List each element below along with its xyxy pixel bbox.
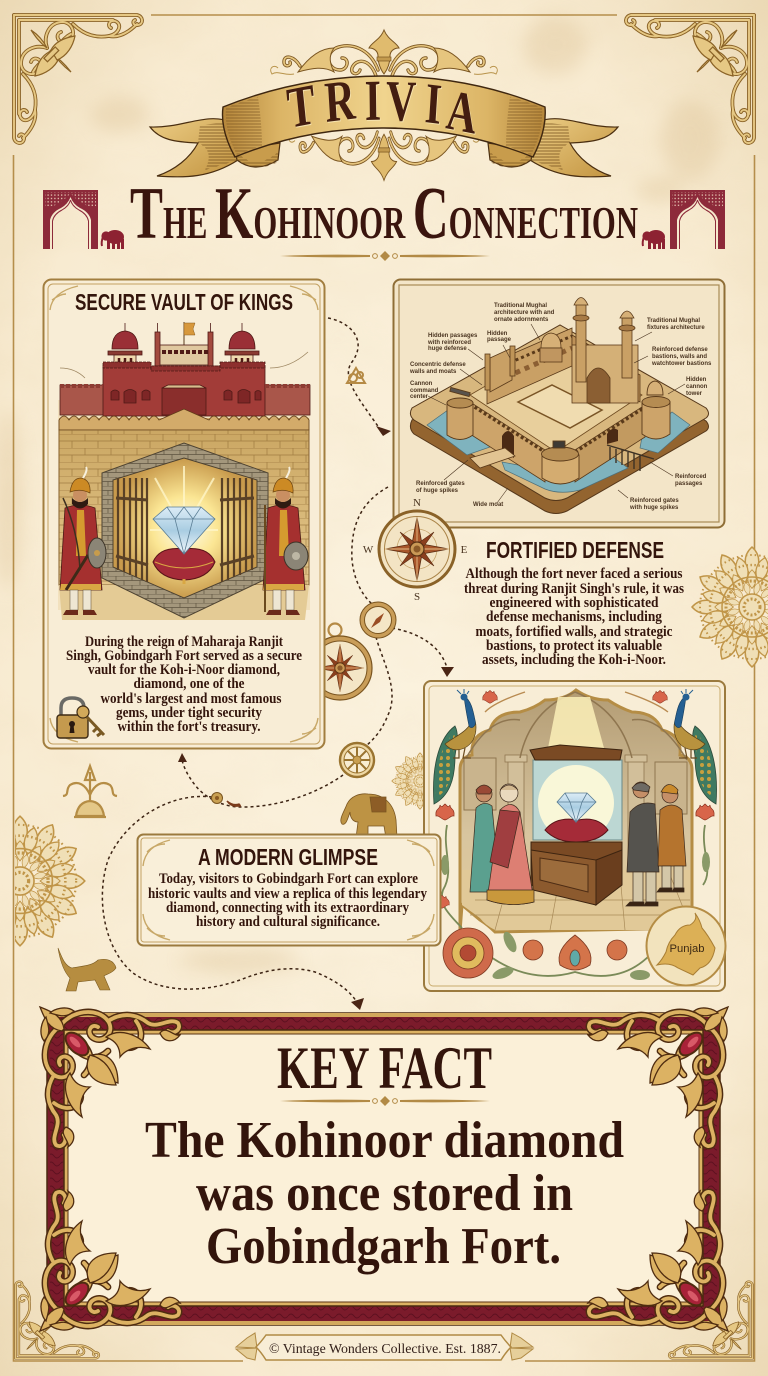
card body text: within the fort's treasury. (118, 719, 260, 735)
panel: a modern glimpse (138, 834, 440, 946)
key fact statement (145, 1112, 624, 1275)
big rosette (443, 928, 493, 978)
iron spikes (607, 445, 654, 471)
footer pill (256, 1335, 511, 1360)
frame gold rule bottom (48, 1321, 719, 1325)
key fact statement: Gobindgarh Fort. (206, 1218, 561, 1275)
text block: fortified defense (464, 537, 684, 668)
diagram callouts: passages (675, 481, 703, 487)
page corner ornament bottom left (16, 1282, 99, 1358)
battlements (59, 409, 309, 430)
compass letters: E (461, 544, 468, 556)
frame lace (50, 1016, 717, 1322)
pocket compass (308, 624, 372, 700)
flag (184, 322, 195, 345)
body text: diamond, connecting with its extraordinary (166, 900, 410, 916)
diagram callouts: huge defense (428, 346, 467, 352)
body text: threat during Ranjit Singh's rule, it was (464, 581, 684, 597)
gold lion icon (58, 948, 116, 991)
dashed journey paths (102, 318, 454, 1010)
light beam (548, 697, 604, 748)
key fact statement: The Kohinoor diamond (145, 1112, 624, 1169)
front left wall (470, 402, 545, 482)
wall gates (502, 429, 618, 458)
isometric fort base (410, 335, 708, 514)
diagram callouts: Reinforced gates (630, 498, 679, 504)
left elephant (101, 230, 124, 249)
back walls (487, 328, 640, 404)
visitor teal dress (470, 785, 500, 892)
moat water (427, 410, 690, 492)
corner ornament bottom right (588, 1191, 728, 1331)
page corner ornament top right (626, 15, 754, 143)
illustration: red fort and vault (58, 322, 310, 620)
small compass (360, 602, 396, 638)
corner towers (447, 381, 670, 484)
corner ornament top right (588, 1007, 728, 1147)
diagram callouts: fixtures architecture (647, 325, 705, 331)
corner ornament bottom left (40, 1191, 180, 1331)
copyright: © Vintage Wonders Collective. Est. 1887. (269, 1342, 501, 1357)
maroon frame (47, 1013, 720, 1325)
body text: moats, fortified walls, and strategic (476, 624, 673, 640)
vault stone box (102, 443, 268, 618)
body text: Today, visitors to Gobindgarh Fort can explore (159, 871, 418, 887)
wall paintings (464, 758, 687, 814)
large compass rose (363, 497, 468, 603)
ribbon tails (150, 119, 618, 177)
diagram callouts: Traditional Mughal (647, 318, 700, 324)
Punjab map medallion: Punjab (670, 943, 704, 955)
inner panel (64, 1030, 703, 1306)
diagram callouts: architecture with and (494, 310, 555, 316)
corner flourishes (143, 840, 434, 940)
red gatehouse (60, 362, 310, 416)
card body text: world's largest and most famous (100, 691, 282, 707)
diamond glow rays (150, 466, 218, 530)
banner title highlight: TRIVIA (285, 68, 481, 147)
ribbon end hatching (226, 97, 542, 155)
heading: FORTIFIED DEFENSE (486, 537, 664, 563)
inner paper (68, 1034, 699, 1302)
trivia banner (150, 30, 618, 180)
right arch (670, 190, 725, 249)
card body text: diamond, one of the (134, 676, 245, 692)
display case (530, 745, 622, 905)
domed towers (108, 323, 259, 368)
corner ornament top left (40, 1007, 180, 1147)
diagram callouts: Hidden (487, 331, 508, 337)
card corner flourishes (50, 286, 318, 742)
diagram callouts: watchtower bastions (651, 361, 712, 367)
arrow emblem icon (63, 766, 117, 817)
body text: assets, including the Koh-i-Noor. (482, 652, 666, 668)
showcase cushion (545, 819, 608, 842)
fort background glow (58, 400, 310, 610)
body text: engineered with sophisticated (490, 595, 658, 611)
diagram callouts: passage (487, 337, 512, 343)
visitor brown coat (657, 784, 686, 892)
museum vault columns (465, 692, 687, 870)
diagram callouts (409, 303, 712, 511)
showcase diamond (557, 793, 596, 822)
body text (464, 566, 684, 668)
compass letters: S (414, 591, 420, 603)
floral vines (442, 692, 707, 976)
body text: historic vaults and view a replica of this legendary (148, 886, 428, 902)
panel: key fact (40, 1007, 728, 1331)
diagram callouts: Hidden passages (428, 333, 478, 339)
diagram callouts: cannon (686, 384, 708, 390)
banner title: TRIVIA (284, 67, 480, 146)
ribbon main band (222, 76, 545, 157)
courtyard (470, 345, 642, 452)
cushion (153, 549, 215, 584)
museum arch interior (460, 690, 692, 932)
main gate complex (572, 298, 638, 403)
footer plate (236, 1333, 533, 1360)
diagram callouts: Hidden (686, 377, 707, 383)
diagram callouts: Concentric defense (410, 362, 466, 368)
diamond (153, 507, 215, 554)
body text: bastions, to protect its valuable (486, 638, 663, 654)
diagram callouts: with huge spikes (629, 505, 679, 511)
heading divider (280, 1096, 490, 1106)
key fact heading: KEY FACT (277, 1035, 492, 1101)
right guard (263, 467, 308, 615)
body text (148, 871, 428, 930)
diagram callouts: center (410, 394, 429, 400)
wall brick courses (59, 430, 309, 585)
vault bars (116, 478, 254, 582)
diagram callouts: of huge spikes (416, 488, 459, 494)
diagram callouts: Reinforced gates (416, 481, 465, 487)
body text: history and cultural significance. (196, 914, 380, 930)
main heading: THE KOHINOOR CONNECTION (130, 173, 638, 255)
card body text: gems, under tight security (116, 705, 263, 721)
centre paisley (559, 935, 591, 970)
left guard (60, 467, 106, 615)
right peacock (674, 689, 717, 804)
fort base top (410, 325, 708, 500)
florals (435, 690, 714, 978)
heading divider (280, 251, 490, 261)
card body text (66, 634, 302, 735)
footer end ornaments (236, 1333, 533, 1360)
compass letters: N (413, 497, 421, 509)
diagram callouts: Reinforced defense (652, 347, 708, 353)
crown ornament (271, 30, 497, 76)
diagram callouts: with reinforced (427, 340, 471, 346)
body text: defense mechanisms, including (486, 609, 663, 625)
diagram callouts: Traditional Mughal (494, 303, 547, 309)
wheel icon (340, 743, 374, 777)
panel: secure vault of kings (44, 280, 324, 748)
diagram callouts: tower (686, 391, 703, 397)
card body text: Singh, Gobindgarh Fort served as a secure (66, 648, 302, 664)
ribbon hatch (198, 122, 570, 170)
leaves (441, 852, 710, 981)
body text: Although the fort never faced a serious (466, 566, 683, 582)
card title: SECURE VAULT OF KINGS (75, 289, 293, 315)
key fact statement: was once stored in (196, 1165, 573, 1222)
right elephant (642, 230, 665, 249)
left arch (43, 190, 98, 249)
visitor grey coat (626, 782, 659, 906)
knot ornament upper (347, 368, 365, 383)
icon: padlock and key (57, 698, 104, 738)
panel: fortified defense diagram (394, 280, 724, 528)
diagram callouts: Reinforced (675, 474, 707, 480)
decorative mandala middle (391, 752, 449, 810)
left peacock (433, 689, 476, 804)
floor lines (470, 875, 690, 930)
gold elephant icon (341, 794, 397, 838)
panel: modern museum illustration (424, 681, 726, 991)
diagram callouts: command (410, 388, 439, 394)
inner court trench (518, 385, 602, 428)
diagram callouts: ornate adornments (494, 317, 549, 323)
floor (462, 870, 690, 930)
pedestal (531, 842, 622, 905)
Punjab map medallion (646, 906, 726, 986)
central dome (540, 333, 562, 362)
card body text: vault for the Koh-i-Noor diamond, (88, 662, 280, 678)
sky clouds (60, 352, 308, 378)
moat bridge (470, 448, 515, 468)
diagram callouts: Cannon (410, 381, 433, 387)
page corner ornament bottom right (669, 1282, 752, 1358)
decorative mandala right (690, 545, 768, 669)
heading: A MODERN GLIMPSE (198, 844, 378, 870)
knot ornament lower (212, 792, 240, 806)
courtyard ground (59, 585, 309, 620)
visitor pink dress (487, 784, 534, 905)
brick wall (59, 430, 309, 585)
decorative mandala left (15, 815, 86, 947)
compass letters (363, 497, 468, 603)
left turret wall (485, 346, 515, 392)
gate pavilion (155, 323, 213, 366)
lower ornament (289, 132, 479, 180)
water stains (0, 15, 720, 972)
compass letters: W (363, 544, 374, 556)
vault glow interior (113, 458, 257, 598)
visitors (470, 782, 686, 906)
frame gold rule (48, 1013, 719, 1017)
card body text: During the reign of Maharaja Ranjit (85, 634, 283, 650)
front right wall (575, 405, 645, 482)
diagram callouts: walls and moats (409, 369, 457, 375)
diagram callouts: bastions, walls and (652, 354, 707, 360)
diagram callouts: Wide moat (473, 502, 503, 508)
page corner ornament top left (14, 15, 142, 143)
